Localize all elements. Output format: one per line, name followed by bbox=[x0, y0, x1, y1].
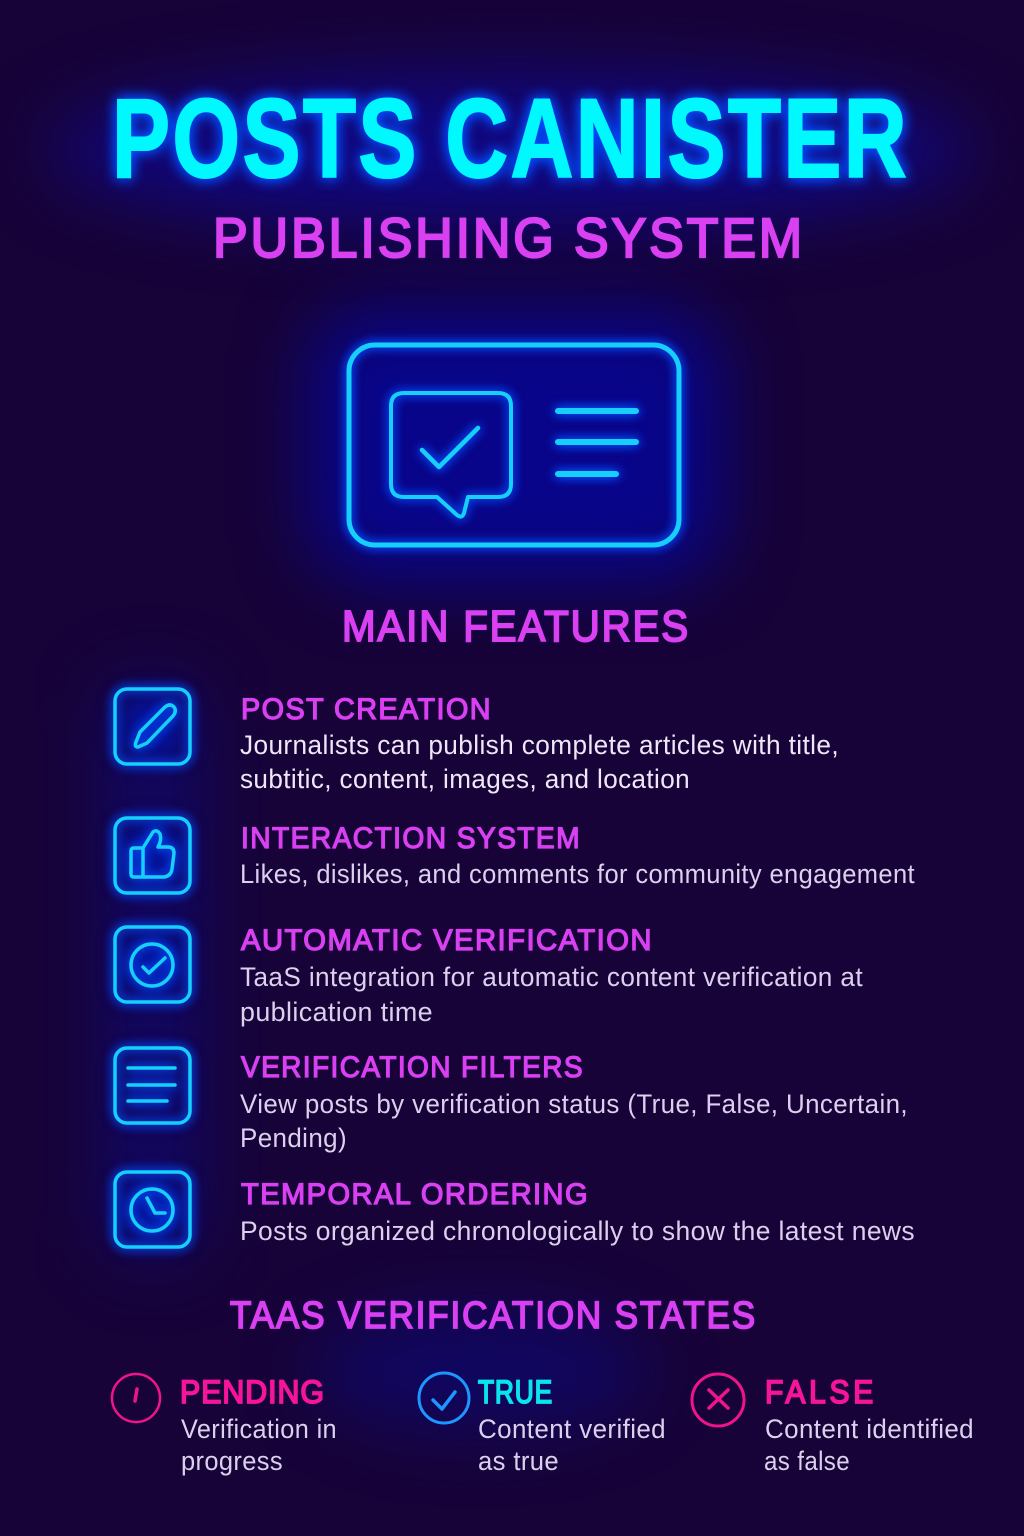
heading: TaaS verification states: TAAS VERIFICATION STATES bbox=[230, 1295, 757, 1337]
description bbox=[240, 962, 863, 1027]
subtitle: PUBLISHING SYSTEM bbox=[213, 206, 805, 269]
label: FALSE bbox=[765, 1374, 877, 1410]
icon: thumbs up bbox=[115, 818, 190, 893]
heading: main features: MAIN FEATURES bbox=[342, 602, 690, 651]
description: Content identified bbox=[765, 1414, 974, 1444]
description: subtitic, content, images, and location bbox=[240, 764, 690, 794]
heading: AUTOMATIC VERIFICATION bbox=[241, 924, 653, 957]
description bbox=[240, 730, 839, 794]
icon: pencil bbox=[115, 689, 190, 764]
description: as false bbox=[764, 1446, 850, 1476]
icon: exclamation circle bbox=[112, 1374, 160, 1422]
icon: post card with verified speech bubble bbox=[349, 345, 679, 545]
icon: check circle bbox=[419, 1373, 469, 1423]
description: Posts organized chronologically to show the latest news bbox=[240, 1216, 915, 1246]
heading: VERIFICATION FILTERS bbox=[241, 1051, 584, 1084]
inner icon tiles glow bbox=[122, 696, 183, 1240]
description: progress bbox=[181, 1446, 283, 1476]
heading: INTERACTION SYSTEM bbox=[241, 822, 581, 855]
description bbox=[478, 1414, 666, 1476]
state: pending bbox=[112, 1374, 337, 1476]
description: Verification in bbox=[181, 1414, 337, 1444]
icon: clock bbox=[115, 1172, 190, 1247]
state: false bbox=[692, 1374, 974, 1476]
icon: list bbox=[115, 1048, 190, 1123]
description: publication time bbox=[240, 997, 433, 1027]
feature: verification filters bbox=[115, 1048, 908, 1153]
description: Likes, dislikes, and comments for community engagement bbox=[240, 859, 915, 889]
icon: check circle bbox=[115, 927, 190, 1002]
heading: POST CREATION bbox=[241, 693, 492, 726]
label: TRUE bbox=[478, 1374, 553, 1410]
feature: automatic verification bbox=[115, 924, 863, 1027]
heading: TEMPORAL ORDERING bbox=[241, 1178, 589, 1211]
description: as true bbox=[478, 1446, 559, 1476]
description: TaaS integration for automatic content verification at bbox=[240, 962, 863, 992]
description bbox=[764, 1414, 974, 1476]
label: PENDING bbox=[180, 1374, 325, 1410]
description: View posts by verification status (True, False, Uncertain, bbox=[240, 1089, 908, 1119]
feature: post creation bbox=[115, 689, 839, 794]
feature: interaction system bbox=[115, 818, 915, 893]
icon: x circle bbox=[692, 1374, 744, 1426]
state: true bbox=[419, 1373, 666, 1476]
feature: temporal ordering bbox=[115, 1172, 915, 1247]
description: Pending) bbox=[240, 1123, 347, 1153]
description: Journalists can publish complete articles with title, bbox=[240, 730, 839, 760]
description bbox=[181, 1414, 337, 1476]
description bbox=[240, 1089, 908, 1153]
description: Content verified bbox=[478, 1414, 666, 1444]
